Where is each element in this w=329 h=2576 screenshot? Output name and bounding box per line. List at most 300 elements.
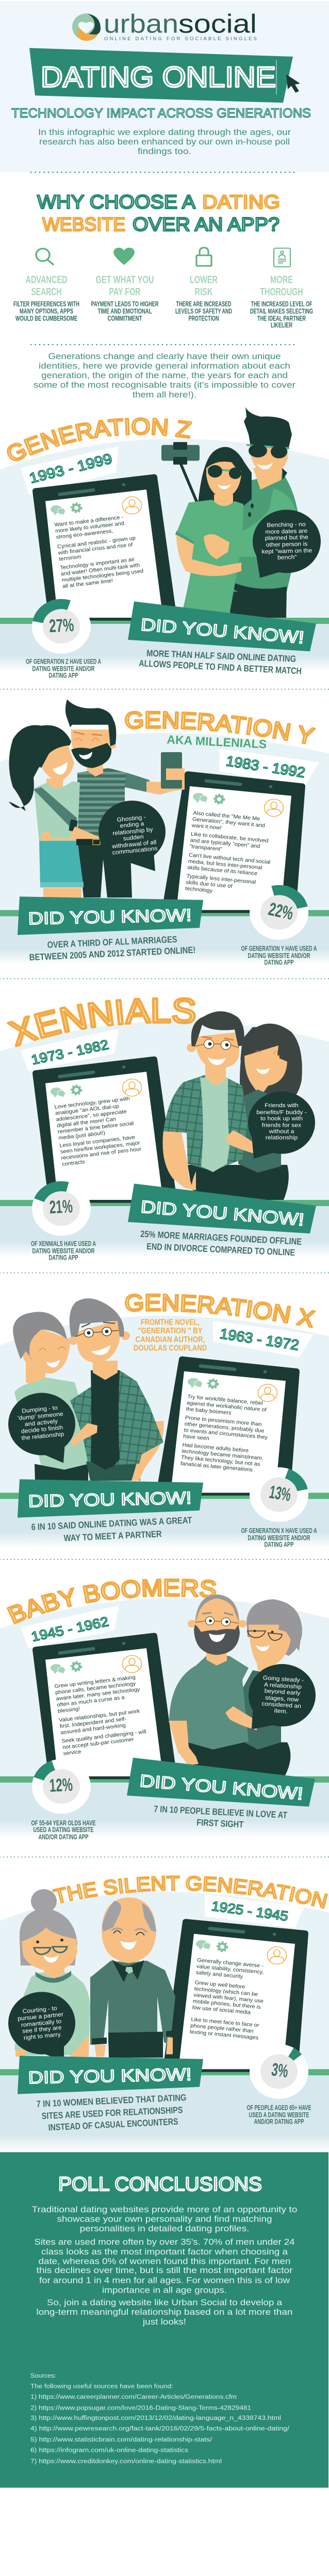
intro text: [38, 127, 291, 156]
generations intro text: identities, here we provide general information about each: [39, 361, 290, 370]
tablet text: digital all the more! Can: [57, 1116, 117, 1129]
tablet text: skills because of its reliance: [187, 865, 258, 877]
heading: silent generation: THE SILENT GENERATION: [52, 1875, 328, 1909]
did you know banner: DID YOU KNOW!: [140, 1197, 305, 1230]
tablet text: Also called the "Me Me Me: [193, 810, 260, 822]
subheading: aka millenials: AKA MILLENIALS: [167, 733, 267, 751]
stat: 12%: AND/OR DATING APP: [39, 1833, 89, 1841]
tablet text: often as much a curse as a: [57, 1694, 125, 1708]
speech bubble: relationship: [266, 1134, 298, 1141]
conclusions text: long-term meaningful relationship based on a lot more than: [36, 2307, 292, 2317]
tablet text: media (just about!): [58, 1130, 106, 1141]
stat: 21%: 21%: [49, 1196, 73, 1217]
did you know banner: DID YOU KNOW!: [28, 1489, 192, 1511]
tablet: [36, 477, 174, 618]
speech bubble: considered an: [261, 1701, 301, 1709]
tablet text: Love technology, grew up with: [54, 1096, 130, 1110]
speech bubble: [8, 1393, 75, 1463]
stat: 21%: OF XENNIALS HAVE USED A: [31, 1240, 96, 1248]
subheading: origin: DOUGLAS COUPLAND: [134, 1344, 207, 1352]
tablet text: strong eco-awareness,: [56, 528, 113, 540]
tablet text: to events and circumstances they: [184, 1427, 268, 1440]
stat: 3%: [246, 2041, 312, 2126]
tablet text: Can't live without tech and social: [188, 852, 271, 866]
date chip: 1973 - 1982: [30, 1037, 110, 1067]
tablet text: and are typically "open" and: [190, 837, 260, 850]
feature: get what you pay for: PAY FOR: [109, 286, 141, 298]
conclusions text: Sites are used more often by over 35's. 70% of men under 24: [35, 2237, 295, 2247]
tablet text: aware later, many see technology: [56, 1686, 141, 1702]
fact text: BETWEEN 2005 AND 2012 STARTED ONLINE!: [29, 944, 196, 962]
speech bubble: romantically to: [21, 2018, 62, 2028]
tablet text: low use of social media: [192, 2005, 251, 2015]
speech bubble: more dates are: [265, 528, 308, 535]
tablet: [159, 1359, 297, 1493]
feature: lower risk: [175, 248, 232, 322]
conclusions text: class looks as the most important factor when choosing a: [41, 2246, 288, 2257]
woman ponytail: [9, 725, 71, 811]
woman face: [244, 1045, 287, 1097]
speech bubble: to hook up with: [260, 1115, 303, 1122]
conclusions text: personalities in detailed dating profiles.: [79, 2224, 249, 2233]
man body: [86, 1462, 140, 1481]
tablet text: [54, 513, 145, 589]
speech bubble: withdrawal of all: [111, 839, 157, 850]
speech bubble: [248, 1092, 315, 1159]
speech bubble: ending a: [120, 820, 144, 829]
fact text: SITES ARE USED FOR RELATIONSHIPS: [41, 2105, 183, 2121]
tablet text: Value relationships, but put work: [59, 1708, 141, 1723]
speech bubble: Going steady -: [262, 1674, 304, 1684]
tablet: [166, 1922, 305, 2069]
tablet text: viewed with fear), many use: [193, 1992, 264, 2004]
illustration: selfie couple: [161, 407, 299, 618]
tablet text: multiple technologies being used: [61, 568, 144, 583]
did you know banner: [18, 1479, 203, 1518]
tablet text: [180, 1394, 272, 1474]
heading: why choose: WHY CHOOSE A: [37, 192, 195, 213]
man body: [188, 1165, 289, 1200]
tablet text: Prone to pessimism more than: [185, 1415, 262, 1428]
tablet text: contracts: [61, 1159, 85, 1167]
man: [119, 1955, 139, 1968]
feature: advanced search: MANY OPTIONS, APPS: [20, 307, 73, 315]
header panel: [0, 1, 329, 172]
feature: more thorough: LIKELIER: [271, 321, 292, 329]
heading: generation X: GENERATION X: [125, 1293, 316, 1328]
feature: get what you pay for: PAYMENT LEADS TO HIGHER: [91, 300, 159, 308]
date chip: 1983 - 1992: [225, 753, 306, 781]
fact text: 6 IN 10 SAID ONLINE DATING WAS A GREAT: [31, 1515, 192, 1532]
conclusions text: for around 1 in 4 men for all ages. For women this is of low: [39, 2275, 290, 2285]
speech bubble: communications: [112, 845, 158, 856]
speech bubble: Dumping - to: [22, 1404, 58, 1414]
subheading: origin: [134, 1318, 207, 1352]
tablet text: They like technology, but not as: [181, 1454, 260, 1467]
fact text: FIRST SIGHT: [196, 1817, 244, 1829]
tablet text: want it now!: [191, 822, 222, 831]
title banner: DATING ONLINE: [41, 61, 276, 93]
tablet text: media, but less inter-personal: [188, 858, 262, 871]
speech bubble: [98, 801, 166, 871]
tablet text: Grew up well before: [194, 1979, 245, 1990]
heading: generation Z: GENERATION Z: [7, 417, 192, 462]
date chip: [21, 446, 119, 495]
tablet text: technology became mainstream.: [182, 1448, 264, 1462]
illustration: couple with phone: [9, 699, 185, 899]
speech bubble: planned but the: [265, 534, 308, 541]
man head: [251, 444, 288, 473]
tablet text: Typically less inter-personal: [186, 873, 256, 885]
did you know banner: DID YOU KNOW!: [28, 906, 192, 928]
icon: magnifier: [36, 249, 53, 264]
tablet text: [54, 1674, 148, 1757]
feature: lower risk: LOWER: [190, 274, 218, 285]
tablet text: Technology is important as air: [60, 556, 135, 571]
stat: 22%: [241, 885, 317, 967]
woman hair back: [246, 1599, 302, 1656]
generations intro text: them all here!).: [133, 389, 196, 399]
tablet text: value stability, consistency,: [196, 1963, 264, 1975]
skirt: [188, 1742, 290, 1776]
stat: 22%: DATING APP: [264, 959, 294, 967]
stat: 27%: DATING APP: [49, 672, 78, 680]
icon: mouse cursor: [286, 74, 300, 93]
speech bubble: Friends with: [265, 1103, 299, 1109]
tablet text: not accept sub-par customer: [62, 1736, 135, 1751]
tablet text: all at the same time!: [62, 578, 113, 589]
speech bubble: see if they are: [22, 2024, 62, 2035]
fact text: WAY TO MEET A PARTNER: [63, 1529, 162, 1543]
stat: 13%: [241, 1466, 317, 1549]
feature: advanced search: WOULD BE CUMBERSOME: [15, 314, 77, 322]
tablet text: analogue "an AOL dial-up: [55, 1103, 120, 1116]
speech bubble: benefits/F buddy -: [256, 1109, 307, 1115]
section: generation X: [0, 1293, 329, 1549]
stat: 13%: 13%: [268, 1482, 293, 1505]
conclusions text: this declines over time, but is still the most important factor: [36, 2265, 293, 2275]
subheading: origin: CANADIAN AUTHOR,: [135, 1335, 205, 1344]
heading: why choose: WEBSITE: [42, 214, 125, 235]
fact text: OVER A THIRD OF ALL MARRIAGES: [47, 934, 177, 950]
speech bubble: kept "warm on the: [261, 547, 312, 555]
fact text: INSTEAD OF CASUAL ENCOUNTERS: [48, 2116, 178, 2132]
logo wordmark: [104, 9, 257, 41]
did you know banner: DID YOU KNOW!: [28, 2065, 192, 2088]
stat: 21%: [30, 1179, 96, 1262]
tablet text: other generations, probably due: [184, 1421, 265, 1434]
speech bubble: beyond early: [264, 1688, 301, 1697]
section: generation Z: [0, 407, 329, 680]
man glasses: [195, 1039, 239, 1049]
woman top: [46, 778, 63, 792]
section: baby boomers: [0, 1579, 329, 1841]
feature: get what you pay for: [91, 248, 159, 322]
feature: more thorough: [250, 248, 313, 329]
generations intro text: some of the most recognisable traits (it's impossible to cover: [34, 380, 295, 390]
stat: 27%: DATING WEBSITE AND/OR: [32, 665, 95, 673]
date chip: [213, 1321, 314, 1358]
tablet text: technology: [185, 886, 213, 894]
stat: 12%: OF 55-64 YEAR OLDS HAVE: [31, 1819, 96, 1827]
sources list: 2) https://www.popsugar.com/love/2016-Dating-Slang-Terms-42829481: [30, 2404, 251, 2412]
section: silent generation: [0, 1875, 329, 2149]
speech bubble: friends for sex: [262, 1122, 301, 1128]
woman: [26, 1361, 45, 1387]
tablet: [36, 1636, 174, 1776]
man shirt: [169, 1656, 249, 1750]
tablet text: technology (which can be: [194, 1986, 258, 1997]
tablet text: seen hire/fire workplaces, major: [60, 1140, 140, 1155]
heading: baby boomers: BABY BOOMERS: [7, 1579, 217, 1624]
selfie stick: [161, 442, 210, 534]
speech bubble: bench": [277, 554, 297, 561]
icon: padlock: [196, 248, 211, 266]
stat: 27%: 27%: [48, 615, 74, 636]
tablet text: fanatical as later generations: [180, 1461, 253, 1473]
speech bubble: [249, 1664, 316, 1730]
man shirt: [77, 768, 150, 840]
stat: 27%: [26, 599, 101, 680]
intro text: research has also been enhanced by our own in-house poll: [39, 137, 290, 146]
heading: why choose: OVER AN APP?: [133, 214, 279, 235]
woman hand: [225, 1706, 257, 1730]
sources list: Sources:: [30, 2372, 56, 2379]
speech bubble: Benching - no: [267, 521, 306, 529]
sources list: 4) http://www.pewresearch.org/fact-tank/2016/02/29/5-facts-about-online-dating/: [30, 2425, 290, 2432]
feature: lower risk: LEVELS OF SAFETY AND: [175, 307, 232, 315]
tablet: [165, 774, 302, 910]
sources list: The following useful sources have been found:: [30, 2383, 173, 2390]
fact text: [36, 2092, 187, 2132]
speech bubble: the relationship: [21, 1431, 64, 1442]
belt: [76, 839, 102, 845]
date chip: [219, 749, 319, 787]
tablet text: phone calls, became technology: [55, 1681, 137, 1696]
speech bubble: Courting - to: [22, 2005, 58, 2015]
did you know banner: DID YOU KNOW!: [139, 1772, 304, 1804]
speech bubble: relationship by: [112, 826, 153, 837]
speech bubble: sudden: [123, 834, 144, 842]
man sunglasses: [246, 445, 289, 448]
conclusions text: date, whereas 0% of women found this important. For men: [39, 2256, 291, 2266]
tablet text: Try for work/life balance, rebel: [187, 1394, 263, 1406]
date chip: 1945 - 1962: [30, 1614, 110, 1645]
heading: xennials: XENNIALS: [7, 997, 196, 1047]
tablet text: [185, 810, 275, 899]
tablet text: terrorism: [59, 554, 81, 562]
tablet text: more likely to volunteer and: [55, 520, 124, 534]
speech bubble: decide to finish: [21, 1424, 63, 1435]
did you know banner: [18, 2056, 203, 2094]
conclusions text: Traditional dating websites provide more of an opportunity to: [32, 2204, 298, 2214]
illustration: elderly couple: [14, 1889, 175, 2058]
tablet text: with financial crisis and rise of: [57, 541, 133, 556]
fact text: [140, 1228, 302, 1258]
fact text: [154, 1803, 288, 1829]
speech bubble: [253, 510, 321, 578]
generations intro text: generation, the origin of the name, the years for each and: [41, 370, 288, 380]
speech bubble: item.: [274, 1707, 288, 1715]
feature: advanced search: [13, 249, 79, 322]
tablet text: "transparent": [189, 843, 223, 852]
title banner: [29, 48, 293, 103]
speech bubble: stages, now: [265, 1694, 299, 1703]
conclusions text: importance in all age groups.: [102, 2285, 227, 2295]
tablet text: adolescence", so appreciate: [56, 1109, 127, 1123]
heading: why choose: [37, 192, 280, 235]
feature: advanced search: SEARCH: [31, 286, 62, 298]
did you know banner: [18, 896, 203, 935]
tablet text: Like to meet face to face or: [191, 2016, 259, 2028]
intro text: In this infographic we explore dating through the ages, our: [38, 127, 291, 137]
feature: lower risk: RISK: [195, 286, 213, 298]
tablet text: Seek quality and challenging - will: [61, 1728, 146, 1744]
did you know banner: [127, 1758, 315, 1807]
tablet text: remember a time before social: [57, 1121, 134, 1135]
tablet text: Grew up writing letters & making: [54, 1674, 136, 1689]
tablet text: Cynical and realistic - grown up: [57, 535, 136, 550]
speech bubble: Ghosting -: [117, 814, 146, 823]
tablet text: safety and security: [195, 1970, 243, 1980]
subheading: origin: FROMTHE NOVEL,: [141, 1318, 200, 1327]
date chip: 1993 - 1999: [27, 451, 114, 487]
stat: 12%: 12%: [49, 1774, 73, 1796]
fact text: [31, 1515, 192, 1543]
tablet text: Want to make a difference -: [54, 514, 124, 528]
stat: 12%: [30, 1758, 96, 1841]
date chip: 1925 - 1945: [210, 1899, 289, 1924]
conclusions text: So, join a dating website like Urban Social to develop a: [47, 2297, 282, 2307]
sources list: 3) http://www.huffingtonpost.com/2013/12/02/dating-language_n_4338743.html: [30, 2415, 281, 2421]
did you know banner: DID YOU KNOW!: [140, 615, 305, 648]
illustration: bearded couple: [169, 1595, 302, 1776]
speech bubble: [8, 1992, 75, 2062]
logo icon: [72, 13, 101, 41]
woman vest: [239, 1670, 281, 1750]
section: xennials: [0, 997, 329, 1262]
logo: [72, 9, 257, 41]
tablet text: Less loyal to companies, have: [59, 1134, 136, 1149]
man pants: [77, 838, 132, 897]
woman head: [40, 741, 74, 782]
tablet text: blessing!: [57, 1706, 80, 1714]
tablet text: [189, 1957, 268, 2041]
feature: get what you pay for: GET WHAT YOU: [96, 274, 154, 285]
woman jeans and legs: [43, 888, 81, 899]
tablet text: Generation", they want it and: [192, 816, 266, 829]
logo wordmark: urban: [104, 9, 178, 39]
conclusions text: [32, 2204, 298, 2327]
tablet text: recessions and rise of zero hour: [61, 1146, 142, 1161]
feature: advanced search: FILTER PREFERENCES WITH: [13, 300, 79, 308]
man head: [87, 763, 103, 776]
woman hair: [240, 1024, 302, 1104]
man arm: [169, 1721, 199, 1765]
stat: 21%: DATING WEBSITE AND/OR: [32, 1247, 95, 1255]
fact text: [139, 648, 302, 676]
illustration: grey-haired couple: [13, 1298, 163, 1481]
subtitle: TECHNOLOGY IMPACT ACROSS GENERATIONS: [11, 106, 311, 121]
feature: lower risk: THERE ARE INCREASED: [176, 300, 232, 308]
tablet text: texting or instant messages: [189, 2029, 259, 2041]
section: generation Y: [0, 700, 329, 967]
feature: more thorough: MORE: [270, 274, 293, 285]
speech bubble: pursue a partner: [17, 2011, 64, 2022]
subheading: origin: "GENERATION " BY: [138, 1327, 203, 1335]
speech bubble: 'dump' someone: [18, 1411, 64, 1421]
speech bubble: and actively: [24, 1418, 58, 1428]
sources list: 7) https://www.creditdonkey.com/online-dating-statistics.html: [30, 2458, 222, 2465]
feature: more thorough: THOROUGH: [260, 286, 303, 298]
tablet text: Had become adults before: [182, 1442, 249, 1454]
tablet text: Like to collaborate, be involved: [190, 831, 269, 844]
tablet text: against the workaholic nature of: [186, 1400, 267, 1413]
generations intro text: [34, 351, 295, 399]
date chip: [21, 1028, 119, 1071]
sources list: 5) http://www.statisticbrain.com/dating-relationship-stats/: [30, 2436, 212, 2443]
feature: advanced search: ADVANCED: [25, 274, 67, 285]
icon: heart: [113, 248, 135, 265]
woman: [31, 1889, 57, 1913]
did you know banner: [128, 1183, 316, 1233]
tablet text: Generally change averse -: [197, 1957, 264, 1969]
fact text: 7 IN 10 WOMEN BELIEVED THAT DATING: [36, 2092, 187, 2109]
man arm and phone: [146, 773, 185, 795]
date chip: [21, 1605, 119, 1648]
logo wordmark: social: [178, 9, 257, 39]
woman: [198, 447, 252, 507]
tablet text: and water! Often multi-task with: [60, 562, 140, 577]
tablet text: have seen: [183, 1433, 210, 1442]
man head: [206, 1651, 227, 1666]
speech bubble: without a: [269, 1128, 294, 1134]
tablet text: assured and hard-working: [60, 1722, 126, 1736]
tablet text: mobile phones, but there is: [192, 1998, 261, 2010]
did you know banner: [128, 601, 316, 651]
man head: [76, 1320, 120, 1363]
speech bubble: right to marry.: [23, 2031, 62, 2041]
logo wordmark: ONLINE DATING FOR SOCIABLE SINGLES: [104, 37, 257, 41]
feature: get what you pay for: COMMITMENT: [107, 314, 142, 322]
date chip: [205, 1894, 304, 1928]
stat: 12%: USED A DATING WEBSITE: [33, 1826, 94, 1834]
woman bangs: [240, 1027, 288, 1061]
conclusions text: just looks!: [142, 2316, 186, 2327]
tablet text: [54, 1095, 143, 1167]
heading: why choose: DATING: [202, 192, 280, 213]
man head: [195, 1032, 239, 1069]
tablet: [36, 1059, 174, 1200]
tablet text: skills due to use of: [186, 879, 233, 889]
woman face: [249, 1625, 291, 1675]
arm and hand: [176, 535, 241, 576]
panel: poll conclusions: [0, 2152, 328, 2488]
speech bubble: A relationship: [264, 1682, 302, 1690]
woman hand: [71, 1423, 97, 1447]
conclusions text: showcase your own personality and find matching: [57, 2214, 272, 2224]
tablet text: phone people rather than: [190, 2023, 254, 2034]
intro text: findings too.: [138, 146, 191, 156]
stat: 21%: DATING APP: [49, 1254, 78, 1262]
woman hand: [225, 1130, 257, 1155]
woman dress: [176, 500, 243, 614]
fact text: [29, 934, 196, 962]
heading: generation Y: GENERATION Y: [125, 711, 316, 744]
fact text: 7 IN 10 PEOPLE BELIEVE IN LOVE AT: [154, 1803, 288, 1820]
feature: lower risk: PROTECTION: [189, 314, 219, 322]
sources list: [30, 2372, 290, 2465]
